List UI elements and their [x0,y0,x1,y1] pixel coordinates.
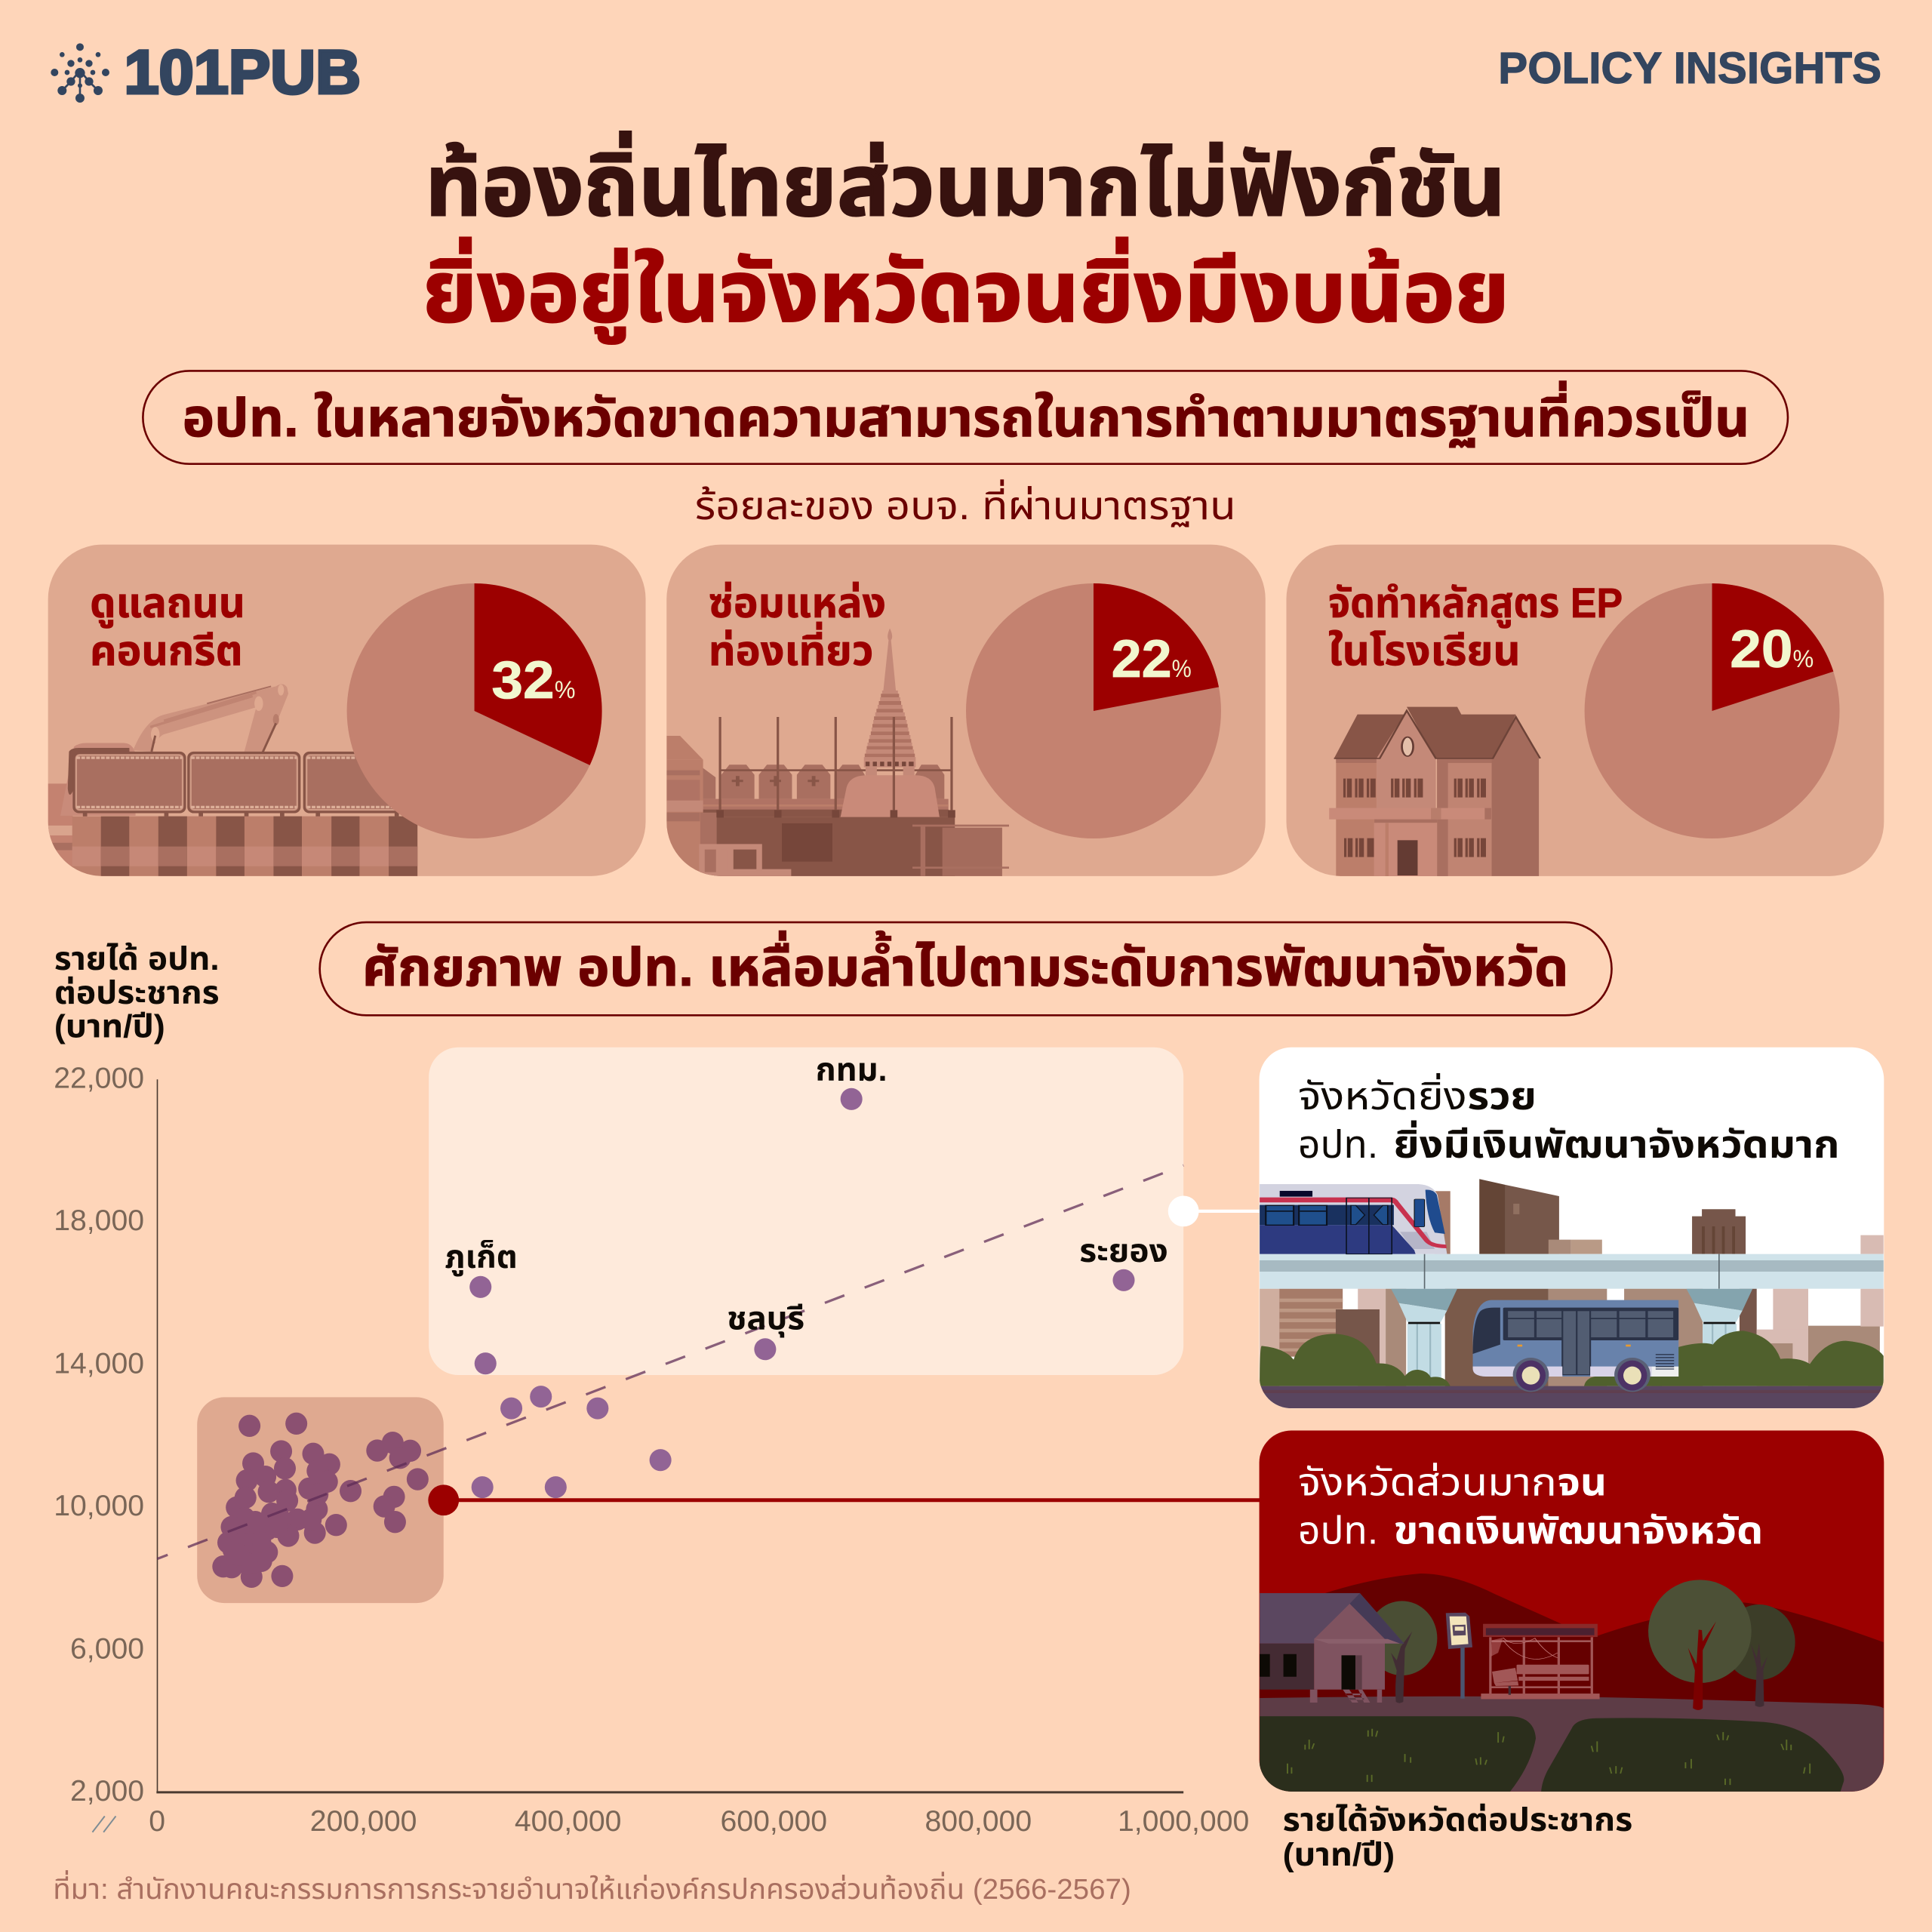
title: tourism sites: ซ่อมแหล่ง [709,580,886,626]
pie chart: 32% [347,583,602,838]
trend line [157,1165,1183,1559]
panel text: rich: รวย [1467,1075,1537,1118]
pie chart: 20% [1585,583,1840,838]
title: concrete roads [90,580,245,675]
source note: ที่มา: สำนักงานคณะกรรมการการกระจายอำนาจให้แก่องค์กรปกครองส่วนท้องถิ่น (2566-2567) [53,1870,1131,1905]
scatter chart [54,1048,1262,1838]
panel: poor provinces [1260,1431,1884,1794]
illustration: school building [1329,707,1540,877]
illustration: skytrain and bus [1260,1179,1884,1408]
y-axis title [54,941,220,1044]
province labels: กทม. [816,1052,888,1088]
pie chart: 20%: % [1793,645,1814,672]
x-axis labels: 800,000 [925,1805,1032,1838]
section heading pill 1 [143,371,1788,464]
y-axis labels: 6,000 [70,1633,144,1666]
x-axis labels: 600,000 [721,1805,827,1838]
panel text: poor: จน [1558,1461,1607,1504]
x-axis labels [149,1805,1249,1838]
panel text: rich: จังหวัดยิ่ง [1298,1072,1467,1118]
x-axis labels: 1,000,000 [1118,1805,1249,1838]
panel text: poor [1298,1461,1763,1552]
title: EP curriculum: ในโรงเรียน [1328,628,1521,675]
y-axis title: รายได้ อปท. [54,941,220,977]
panel: concrete roads [48,545,646,876]
axes [156,1079,1183,1792]
x-axis labels: 400,000 [515,1805,621,1838]
section heading pill 2 [320,922,1612,1015]
province labels: ภูเก็ต [445,1239,518,1276]
highlight: poor provinces [197,1397,444,1603]
section heading text 1: อปท. ในหลายจังหวัดขาดความสามารถในการทำตามมาตรฐานที่ควรเป็น [183,381,1749,448]
pie chart: 32%: 32 [491,650,555,709]
panel: EP curriculum [1286,545,1884,877]
y-axis title: ต่อประชากร [54,975,220,1011]
illustration: temple [666,629,1009,878]
connector: poor [428,1484,1262,1515]
panel text: poor: อปท. [1298,1509,1378,1552]
section heading text 2: ศักยภาพ อปท. เหลื่อมล้ำไปตามระดับการพัฒนาจังหวัด [362,931,1568,997]
logo wordmark: 101PUB [125,38,361,106]
title line 2: ยิ่งอยู่ในจังหวัดจนยิ่งมีงบน้อย [423,237,1509,344]
province labels [445,1052,1168,1338]
panel text: rich: อปท. [1298,1123,1378,1166]
title: EP curriculum [1328,580,1623,675]
title line 1: ท้องถิ่นไทยส่วนมากไม่ฟังก์ชัน [425,131,1506,235]
y-axis labels: 10,000 [54,1490,144,1522]
title: tourism sites: ท่องเที่ยว [709,621,874,675]
panel: tourism sites [666,545,1266,878]
panel text: poor: ขาดเงินพัฒนาจังหวัด [1394,1509,1763,1552]
y-axis labels: 22,000 [54,1063,144,1095]
title: tourism sites [709,580,886,675]
x-axis title [1283,1802,1632,1872]
dots: clustered provinces [212,1413,429,1588]
pie chart: 22% [966,583,1221,838]
illustration: rural scene [1260,1574,1884,1794]
province labels: ชลบุรี [727,1301,804,1338]
pie chart: 22%: 22 [1112,629,1172,688]
header label: POLICY INSIGHTS: POLICY INSIGHTS [1498,44,1881,93]
x-axis labels: 0 [149,1805,165,1838]
y-axis labels: 14,000 [54,1348,144,1380]
illustration: excavator and road [48,684,417,876]
title [423,131,1509,344]
panel: rich provinces [1260,1048,1884,1408]
x-axis title: รายได้จังหวัดต่อประชากร [1283,1802,1632,1838]
title: concrete roads: ดูแลถนน [90,580,245,629]
subtitle: ร้อยละของ อบจ. ที่ผ่านมาตรฐาน [695,479,1236,528]
pie chart: 32%: % [555,675,575,703]
x-axis title: (บาท/ปี) [1283,1837,1395,1872]
pie chart: 22%: % [1172,654,1192,682]
logo: 101PUB [51,38,361,106]
y-axis title: (บาท/ปี) [54,1009,165,1044]
title: concrete roads: คอนกรีต [90,628,243,675]
y-axis labels: 2,000 [70,1775,144,1807]
icon: logo network [51,43,109,103]
highlight: rich provinces [429,1048,1183,1375]
connector: rich [1168,1195,1262,1226]
panel text: rich: ยิ่งมีเงินพัฒนาจังหวัดมาก [1394,1120,1840,1166]
panel text: poor: จังหวัดส่วนมาก [1298,1461,1557,1504]
dots: other provinces [469,1088,1135,1498]
x-axis labels: 200,000 [310,1805,417,1838]
y-axis labels: 18,000 [54,1204,144,1237]
panel text: rich [1298,1072,1840,1166]
title: EP curriculum: จัดทำหลักสูตร EP [1328,580,1623,629]
y-axis labels [54,1063,144,1807]
pie chart: 20%: 20 [1730,619,1793,678]
province labels: ระยอง [1079,1233,1168,1269]
axis break [92,1817,115,1832]
